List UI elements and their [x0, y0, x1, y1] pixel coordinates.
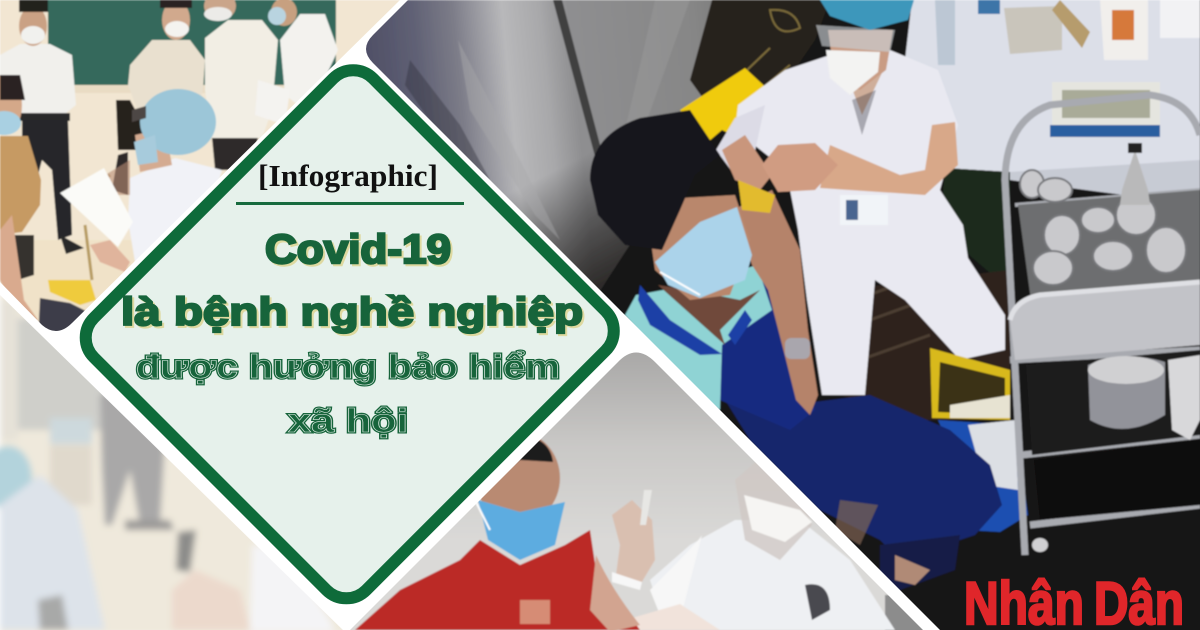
central rounded diamond panel [74, 59, 625, 610]
checkered floor patch [884, 594, 923, 630]
nurse in white [634, 495, 896, 630]
paper form [60, 168, 133, 247]
face, shield and mask [828, 30, 893, 90]
yellow container and dark stool [48, 280, 96, 305]
dark patterned area [690, 0, 826, 97]
gloved hand with syringe [612, 490, 655, 590]
white device on the cart [1053, 83, 1159, 124]
heading line: Covid-19: Covid-19 [267, 228, 453, 274]
steel cart [1005, 95, 1200, 555]
divider under tag [236, 202, 464, 205]
floor behind [838, 270, 1010, 420]
heading line: là bệnh nghề nghiệp: là bệnh nghề nghiệp [123, 293, 585, 336]
diamond shape [74, 59, 625, 610]
patient pants and torso [590, 110, 1002, 590]
seated woman in tan blouse [0, 75, 41, 320]
steel drum on lower shelf [1088, 357, 1165, 429]
photo: officials at the vaccination site, top left [0, 0, 420, 345]
heading line: được hưởng bảo hiểm: được hưởng bảo hiểm [136, 348, 560, 385]
blue cap [820, 0, 914, 30]
nurse [716, 0, 1005, 395]
logo: Nhân Dân [964, 570, 1184, 630]
yellow sharps bin [680, 67, 764, 142]
man in red shirt [355, 432, 640, 630]
faded photo: bottom left [0, 290, 350, 630]
heading line: xã hội: xã hội [288, 402, 408, 439]
yellow waste bin and blue bag [930, 348, 1010, 420]
man in white shirt, left [0, 0, 84, 254]
raised arm [733, 190, 818, 415]
steel dishes on cart [1020, 170, 1186, 285]
cart wheel [1032, 538, 1048, 552]
heading line: xã hội: xã hội [288, 402, 408, 439]
heading line: Covid-19: Covid-19 [265, 226, 451, 272]
man in white shirt, right [255, 0, 338, 125]
main photo: nurse vaccinating a man [350, 0, 1200, 630]
table and equipment [905, 0, 1200, 175]
hair [590, 110, 720, 250]
photo: man in red shirt being vaccinated, bottom centre [340, 340, 940, 630]
teal shirt collar area [625, 265, 772, 410]
nurse with blue hair net [100, 89, 222, 262]
face and mask [650, 194, 740, 301]
heading line: được hưởng bảo hiểm: được hưởng bảo hiểm [136, 348, 560, 385]
woman in beige blouse [116, 0, 205, 150]
tag: [Infographic]: [Infographic] [258, 158, 438, 193]
metal wall [366, 0, 713, 290]
chair and floor details [85, 175, 110, 280]
man in white shirt, centre [204, 0, 278, 170]
heading line: là bệnh nghề nghiệp: là bệnh nghề nghiệp [121, 291, 583, 334]
